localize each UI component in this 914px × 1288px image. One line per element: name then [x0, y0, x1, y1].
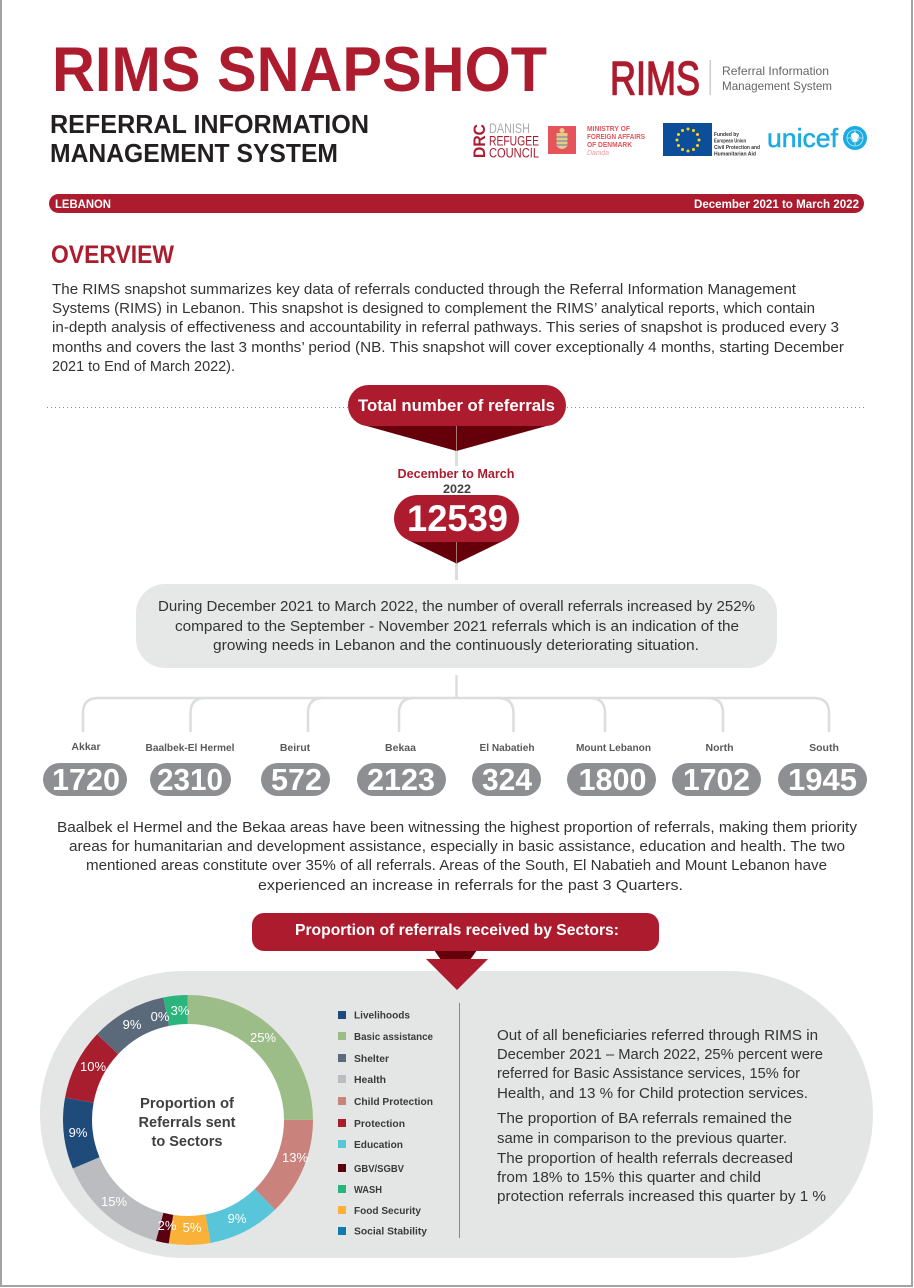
- location and date bar: [49, 194, 864, 213]
- overview text: Systems (RIMS) in Lebanon. This snapshot is designed to complement the RIMS’ analytical reports, which contain: [52, 300, 815, 317]
- sector commentary text: Out of all beneficiaries referred through RIMS in: [497, 1027, 818, 1044]
- donut chart: referrals by sector: 25%: [250, 1030, 276, 1045]
- chart legend: Shelter: [354, 1054, 389, 1065]
- overview text: [52, 281, 844, 375]
- donut chart: referrals by sector: Proportion of: [140, 1096, 234, 1112]
- logo: RIMS: [610, 52, 832, 104]
- region: Akkar: Akkar: [71, 741, 101, 753]
- overview text: months and covers the last 3 months’ period (NB. This snapshot will cover exceptionally 4 months, starting December: [52, 339, 844, 356]
- logo: European Union funding: Humanitarian Aid: [714, 152, 756, 158]
- region: Baalbek-El Hermel: 2310: [157, 762, 223, 797]
- regional commentary text: areas for humanitarian and development assistance, especially in basic assistance, education and health. The two: [69, 838, 845, 855]
- sector commentary text: referred for Basic Assistance services, 15% for: [497, 1065, 800, 1082]
- title: RIMS SNAPSHOT: [52, 35, 547, 105]
- logo: Danish Refugee Council: REFUGEE: [489, 134, 539, 148]
- subtitle: REFERRAL INFORMATION: [50, 109, 369, 139]
- region: Baalbek-El Hermel: [146, 742, 235, 797]
- logo: RIMS: Referral Information: [722, 64, 829, 78]
- logo: Ministry of Foreign Affairs of Denmark: FOREIGN AFFAIRS: [587, 132, 645, 141]
- region: Bekaa: 2123: [367, 762, 435, 797]
- logo: RIMS: RIMS: [610, 52, 700, 104]
- donut chart: referrals by sector: Referrals sent: [138, 1115, 236, 1131]
- chart legend: GBV/SGBV: [354, 1164, 404, 1175]
- donut chart: referrals by sector: 2%: [158, 1218, 177, 1233]
- logo: UNICEF: [767, 123, 867, 153]
- logo: Danish Refugee Council: COUNCIL: [489, 146, 539, 160]
- location and date bar: LEBANON: [55, 197, 111, 211]
- donut chart: referrals by sector: 13%: [282, 1150, 308, 1165]
- logo: Danish Refugee Council: DANISH: [489, 121, 530, 136]
- region: Bekaa: Bekaa: [385, 742, 416, 754]
- connector tree: [83, 675, 829, 732]
- donut chart: referrals by sector: 5%: [183, 1220, 202, 1235]
- heading: overview: OVERVIEW: [51, 241, 174, 269]
- donut chart: referrals by sector: 15%: [101, 1194, 127, 1209]
- region: Beirut: 572: [271, 762, 322, 797]
- subtitle: [50, 109, 369, 168]
- sector commentary text: The proportion of BA referrals remained the: [497, 1110, 792, 1127]
- period label: [398, 467, 514, 496]
- region: Beirut: Beirut: [280, 742, 311, 754]
- subtitle: MANAGEMENT SYSTEM: [50, 138, 338, 168]
- region: Baalbek-El Hermel: Baalbek-El Hermel: [146, 742, 235, 754]
- callout: total number of referrals: [348, 385, 566, 451]
- region: South: [778, 742, 867, 797]
- chart legend: Child Protection: [354, 1097, 433, 1108]
- regional commentary text: experienced an increase in referrals for the past 3 Quarters.: [258, 877, 683, 894]
- summary panel: growing needs in Lebanon and the continuously deteriorating situation.: [213, 637, 699, 654]
- donut chart: referrals by sector: 10%: [80, 1059, 106, 1074]
- chart legend: Livelihoods: [354, 1010, 410, 1022]
- logo: Ministry of Foreign Affairs of Denmark: MINISTRY OF: [587, 124, 630, 133]
- region: El Nabatieh: [472, 742, 541, 797]
- region: Beirut: [261, 742, 330, 797]
- sector commentary text: [497, 1027, 826, 1205]
- period label: December to March: [398, 467, 514, 481]
- regional commentary text: Baalbek el Hermel and the Bekaa areas have been witnessing the highest proportion of referrals, making them priority: [57, 819, 857, 836]
- region: Akkar: [43, 741, 127, 797]
- logo: Danish Refugee Council: [470, 121, 539, 160]
- logo: European Union funding: Funded by: [714, 132, 740, 138]
- region: Mount Lebanon: 1800: [578, 762, 646, 797]
- sectors banner: Proportion of referrals received by Sectors:: [295, 922, 619, 939]
- chart legend: WASH: [354, 1185, 382, 1196]
- region: Mount Lebanon: [567, 742, 656, 797]
- donut chart: referrals by sector: 3%: [171, 1003, 190, 1018]
- period label: 2022: [443, 482, 471, 496]
- regional commentary text: mentioned areas constitute over 35% of all referrals. Areas of the South, El Nabatieh and Mount Lebanon have: [86, 857, 827, 874]
- logo: RIMS: Management System: [722, 79, 832, 93]
- logo: European Union funding: European Union: [714, 138, 746, 144]
- sector commentary text: Health, and 13 % for Child protection services.: [497, 1085, 808, 1102]
- chart legend: Education: [354, 1140, 403, 1151]
- donut chart: referrals by sector: 0%: [151, 1009, 170, 1024]
- location and date bar: December 2021 to March 2022: [694, 197, 859, 211]
- summary panel: compared to the September - November 2021 referrals which is an indication of the: [175, 618, 739, 635]
- region: Akkar: 1720: [52, 762, 120, 797]
- overview text: in-depth analysis of effectiveness and accountability in referral pathways. This series of snapshot is produced every 3: [52, 319, 839, 336]
- regional commentary text: [57, 819, 857, 894]
- overview text: 2021 to End of March 2022).: [52, 358, 235, 375]
- chart legend: Protection: [354, 1119, 405, 1130]
- donut chart: referrals by sector: 9%: [123, 1017, 142, 1032]
- chart legend: [338, 1010, 433, 1238]
- chart legend: Basic assistance: [354, 1032, 433, 1043]
- chart legend: Food Security: [354, 1206, 421, 1217]
- chart legend: Health: [354, 1075, 386, 1086]
- total referrals value: [394, 495, 519, 564]
- region: Mount Lebanon: Mount Lebanon: [576, 742, 651, 754]
- region: El Nabatieh: El Nabatieh: [480, 742, 534, 754]
- region: South: South: [809, 742, 839, 754]
- logo: Ministry of Foreign Affairs of Denmark: [548, 124, 645, 157]
- sector commentary text: from 18% to 15% this quarter and child: [497, 1169, 761, 1186]
- donut chart: referrals by sector: [63, 995, 313, 1245]
- sector commentary text: same in comparison to the previous quarter.: [497, 1130, 787, 1147]
- logo: Danish Refugee Council: DRC: [470, 124, 489, 158]
- chart legend: Social Stability: [354, 1226, 427, 1238]
- summary panel: During December 2021 to March 2022, the number of overall referrals increased by 252%: [158, 598, 755, 615]
- donut chart: referrals by sector: 9%: [69, 1125, 88, 1140]
- region: Bekaa: [357, 742, 446, 797]
- logo: European Union funding: Civil Protection and: [714, 145, 760, 151]
- sectors banner: [252, 913, 659, 990]
- total referrals value: 12539: [407, 498, 508, 539]
- region: North: [672, 742, 761, 797]
- region: South: 1945: [788, 762, 857, 797]
- region: North: North: [706, 742, 734, 754]
- donut chart: referrals by sector: to Sectors: [152, 1134, 222, 1150]
- region: North: 1702: [683, 762, 750, 797]
- summary panel: [136, 584, 777, 668]
- sector commentary text: The proportion of health referrals decreased: [497, 1150, 793, 1167]
- panel: sectors background: [40, 971, 873, 1258]
- donut chart: referrals by sector: 9%: [228, 1211, 247, 1226]
- overview text: The RIMS snapshot summarizes key data of referrals conducted through the Referral Information Management: [52, 281, 797, 298]
- callout: total number of referrals: Total number of referrals: [358, 396, 555, 415]
- sector commentary text: December 2021 – March 2022, 25% percent were: [497, 1046, 823, 1063]
- logo: UNICEF: unicef: [767, 123, 839, 153]
- logo: Ministry of Foreign Affairs of Denmark: Danida: [587, 150, 609, 157]
- region: El Nabatieh: 324: [482, 762, 533, 797]
- sector commentary text: protection referrals increased this quarter by 1 %: [497, 1188, 826, 1205]
- logo: European Union funding: [663, 123, 760, 158]
- logo: Ministry of Foreign Affairs of Denmark: OF DENMARK: [587, 140, 633, 149]
